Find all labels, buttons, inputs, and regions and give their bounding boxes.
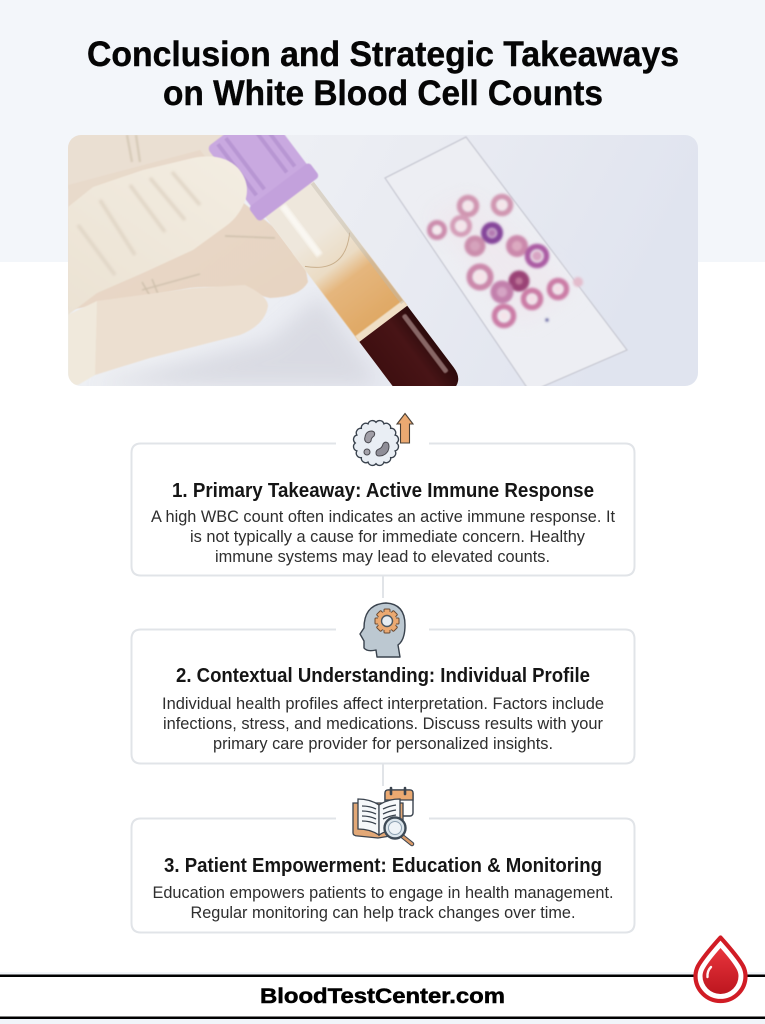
title: Conclusion and Strategic Takeaways <box>87 35 679 74</box>
front finger <box>68 156 268 385</box>
body text: infections, stress, and medications. Discuss results with your <box>163 714 603 733</box>
shadow under hand <box>131 302 369 386</box>
title <box>87 35 679 113</box>
photo: gloved hand holding blood tube beside microscope slide <box>68 135 698 386</box>
icon: blood drop logo <box>696 938 746 1001</box>
top background band <box>0 0 765 262</box>
body text: Education empowers patients to engage in health management. <box>152 883 614 902</box>
connector lines between cards <box>382 576 384 786</box>
heading: 2. Contextual Understanding: Individual Profile <box>176 665 590 687</box>
icon: book, calendar and magnifier <box>353 788 413 844</box>
microscope slide <box>385 137 627 392</box>
panel 3: patient empowerment <box>132 788 634 932</box>
body text: is not typically a cause for immediate concern. Healthy <box>190 527 585 546</box>
heading: 3. Patient Empowerment: Education & Monitoring <box>164 855 602 877</box>
body text: Individual health profiles affect interpretation. Factors include <box>162 694 604 713</box>
site name: BloodTestCenter.com <box>260 985 505 1008</box>
body text: primary care provider for personalized insights. <box>213 734 553 753</box>
body text: A high WBC count often indicates an active immune response. It <box>151 507 615 526</box>
heading: 1. Primary Takeaway: Active Immune Response <box>172 480 594 502</box>
title: on White Blood Cell Counts <box>163 74 603 113</box>
body text <box>151 507 615 566</box>
body text <box>152 883 614 922</box>
footer <box>0 938 765 1024</box>
panel 1: primary takeaway <box>132 414 634 576</box>
body text: Regular monitoring can help track changes over time. <box>190 903 576 922</box>
icon: white blood cell with up arrow <box>354 414 413 465</box>
body text: immune systems may lead to elevated counts. <box>215 547 550 566</box>
icon: head with gear <box>360 603 405 657</box>
panel 2: contextual understanding <box>132 603 634 764</box>
body text <box>162 694 604 753</box>
test tube <box>208 135 458 386</box>
back fingers of glove <box>60 130 308 310</box>
tube cap <box>208 135 319 221</box>
